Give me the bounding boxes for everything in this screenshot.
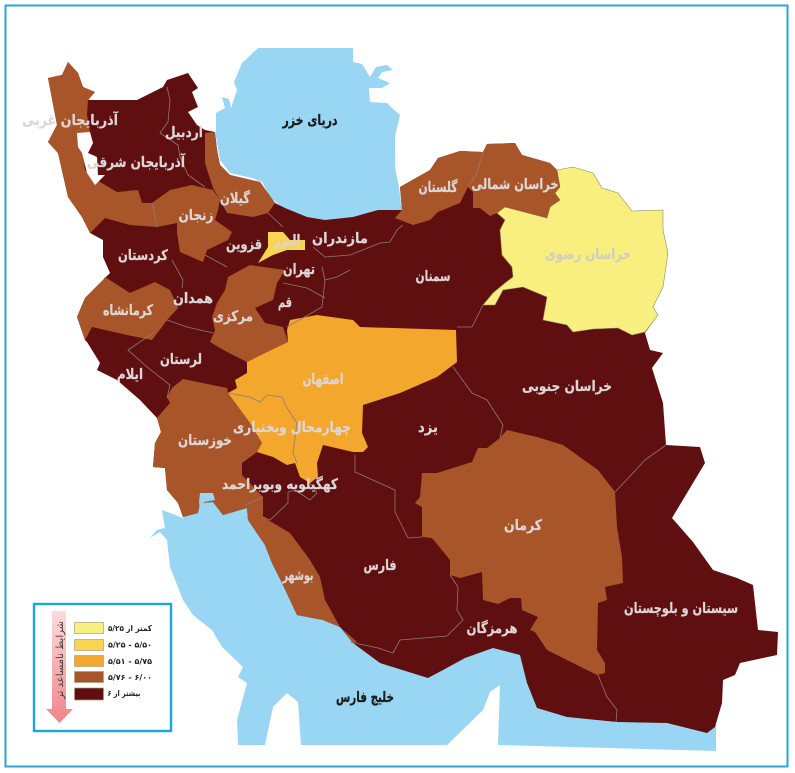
- Golestan and North Khorasan: [395, 143, 560, 225]
- water: Persian Gulf: [150, 490, 716, 751]
- province labels: آذربایجان غربی: [22, 111, 119, 129]
- province labels: خراسان جنوبی: [522, 379, 612, 395]
- legend box: [34, 604, 171, 731]
- legend row: above 6: بیشتر از ۶: [108, 689, 140, 698]
- province labels: یزد: [418, 420, 438, 436]
- Kerman: [415, 430, 623, 675]
- Khuzestan and Bushehr: [153, 379, 357, 643]
- Isfahan and Chaharmahal: [228, 315, 457, 483]
- province labels: کهگیلویه وبویراحمد: [222, 475, 338, 493]
- sea label: Caspian: دریای خزر: [282, 113, 338, 129]
- legend row: 5.51-5.75: ۵/۵۱ - ۵/۷۵: [108, 657, 152, 666]
- province labels: همدان: [173, 291, 213, 307]
- Lake Urmia: [77, 132, 105, 185]
- Gilan: [205, 132, 275, 217]
- province labels: گلستان: [418, 178, 458, 196]
- province labels: هرمزگان: [466, 619, 518, 637]
- province labels: آذربایجان شرقی: [87, 153, 186, 171]
- province labels: کرمانشاه: [103, 303, 153, 319]
- province labels: گیلان: [220, 189, 250, 207]
- province labels: قزوین: [226, 237, 262, 253]
- legend row: 5.76-6.00: ۵/۷۶ - ۶/۰۰: [108, 673, 152, 682]
- province labels: لرستان: [160, 352, 202, 368]
- province labels: اردبیل: [165, 125, 203, 141]
- province labels: کرمان: [504, 518, 542, 534]
- province labels: اصفهان: [302, 372, 344, 388]
- province labels: تهران: [283, 262, 315, 278]
- province labels: خراسان شمالی: [472, 177, 558, 193]
- dark provinces base silhouette: [48, 62, 778, 733]
- sea label: Persian Gulf: خلیج فارس: [336, 690, 394, 706]
- province labels: ایلام: [117, 367, 143, 383]
- province labels: خوزستان: [178, 433, 232, 449]
- Kermanshah: [77, 277, 178, 340]
- province borders: [128, 87, 666, 722]
- province labels: سیستان و بلوچستان: [624, 601, 738, 617]
- province labels: خراسان رضوی: [545, 247, 631, 263]
- legend row: below 5.25: کمتر از ۵/۲۵: [108, 624, 152, 633]
- province labels: [22, 111, 738, 637]
- arrow label: شرایط نامساعد تر: [55, 621, 66, 700]
- Markazi: [210, 265, 288, 362]
- West Azerbaijan and Zanjan: [48, 62, 232, 262]
- province labels: فارس: [364, 558, 396, 574]
- map of Iran provinces: [48, 62, 778, 733]
- water: Caspian Sea: [216, 48, 402, 222]
- legend row: 5.25-5.50: ۵/۲۵ - ۵/۵۰: [108, 640, 152, 650]
- province labels: البرز: [273, 233, 300, 249]
- small inlet near Khuzestan: [199, 493, 215, 510]
- Razavi Khorasan: [483, 167, 668, 335]
- province labels: قم: [278, 295, 292, 311]
- province labels: بوشهر: [282, 568, 314, 584]
- province labels: سمنان: [416, 269, 450, 285]
- legend: [34, 604, 171, 731]
- province labels: مازندران: [312, 231, 368, 247]
- province labels: چهارمحال وبختیاری: [233, 420, 351, 436]
- province labels: زنجان: [178, 208, 214, 224]
- arrow: conditions worsen: [46, 611, 73, 723]
- province labels: مرکزی: [213, 309, 253, 325]
- province labels: کردستان: [118, 248, 168, 264]
- Alborz: [258, 232, 305, 263]
